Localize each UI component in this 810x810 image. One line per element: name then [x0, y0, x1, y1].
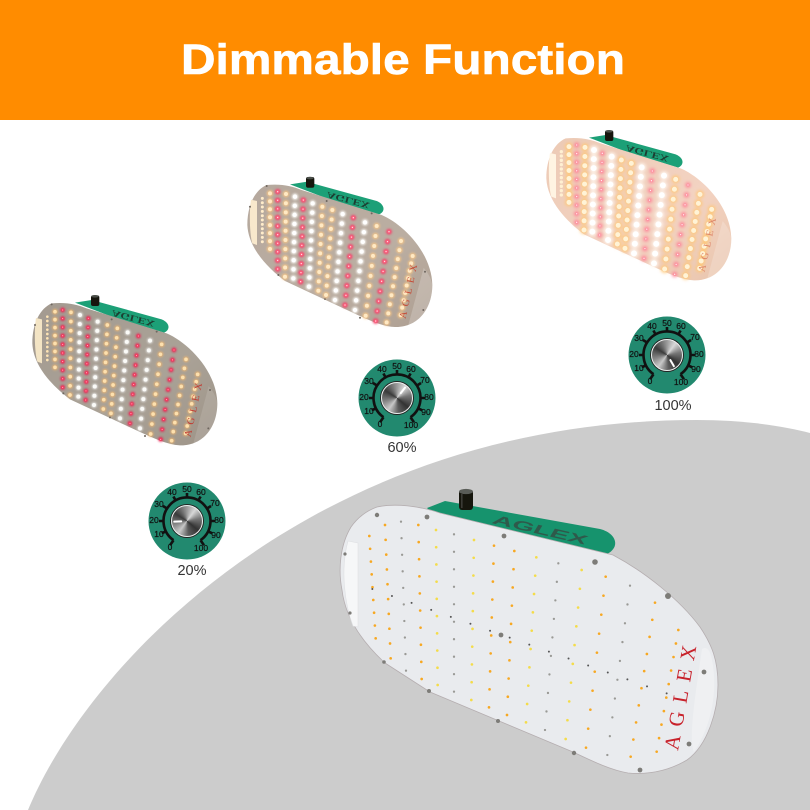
- dial: 60%: 40: [377, 364, 387, 374]
- panel: unlit LED board: [340, 489, 718, 773]
- dial: 100%: 30: [634, 333, 644, 343]
- dial: 60%: 70: [420, 375, 430, 385]
- knob set to 20: [171, 505, 203, 537]
- dial: 20%: 70: [210, 498, 220, 508]
- panel: light at 100% brightness: [546, 130, 731, 280]
- red logo: AGLEX: [697, 216, 719, 273]
- panel: light at 20% brightness: [32, 295, 217, 445]
- dial: 60%: 20: [359, 392, 369, 402]
- dial: 100%: 80: [694, 349, 704, 359]
- dial: 20%: [148, 482, 226, 560]
- gray curved backdrop: [28, 420, 810, 810]
- dial: 20%: 30: [154, 499, 164, 509]
- red logo: AGLEX: [659, 643, 701, 752]
- dial: 20%: 40: [167, 487, 177, 497]
- dial: 100%: 100: [674, 377, 688, 387]
- LED array: [561, 145, 712, 276]
- label: 60%: 60%: [387, 440, 417, 456]
- dial: 60%: 100: [404, 420, 418, 430]
- title: Dimmable Function: [181, 36, 625, 84]
- board body: [340, 505, 718, 773]
- label: 100%: 100%: [654, 398, 692, 414]
- dark LED row: [372, 589, 667, 693]
- red logo: AGLEX: [183, 381, 205, 438]
- dial: 60%: [358, 360, 436, 436]
- dial: 60%: 50: [392, 361, 402, 371]
- dial: 60%: 0: [378, 419, 383, 429]
- dial: 20%: 90: [211, 530, 221, 540]
- label: 20%: 20%: [177, 563, 207, 579]
- plate logo: AGLEX: [326, 190, 372, 211]
- dial: 100%: 0: [648, 376, 653, 386]
- dial: 60%: 30: [364, 376, 374, 386]
- LED grid: [369, 522, 678, 757]
- LED array: [47, 310, 198, 441]
- knob: [91, 295, 99, 306]
- knob: [605, 130, 613, 141]
- plate logo: AGLEX: [489, 512, 591, 547]
- dial: 60%: 90: [421, 407, 431, 417]
- gray LEDs: [401, 522, 630, 755]
- yellow LEDs: [436, 530, 582, 739]
- dial: 20%: 80: [214, 515, 224, 525]
- dial: 100%: 70: [690, 332, 700, 342]
- red logo: AGLEX: [398, 263, 420, 320]
- plate logo: AGLEX: [625, 143, 671, 164]
- orange LEDs: [369, 525, 678, 757]
- dial: 20%: 100: [194, 543, 208, 553]
- screws: [343, 513, 706, 772]
- dial: 20%: 50: [182, 484, 192, 494]
- left tab: [344, 541, 358, 627]
- dial: 20%: 10: [154, 529, 164, 539]
- dial: 60%: 10: [364, 406, 374, 416]
- knob set to 100: [651, 339, 683, 371]
- knob: [306, 177, 314, 188]
- plate logo: AGLEX: [111, 308, 157, 329]
- panel: light at 60% brightness: [247, 177, 432, 327]
- dial: 100%: 60: [676, 321, 686, 331]
- dial: 60%: 60: [406, 364, 416, 374]
- right tab: [692, 648, 714, 752]
- orange header band: [0, 0, 810, 120]
- dial: 100%: 90: [691, 364, 701, 374]
- dial: 60%: 80: [424, 392, 434, 402]
- control knob: [459, 489, 473, 510]
- dial: 100%: 20: [629, 349, 639, 359]
- dial: 100%: 40: [647, 321, 657, 331]
- dial: 20%: 0: [168, 542, 173, 552]
- dial: 20%: 20: [149, 515, 159, 525]
- LED array: [262, 192, 413, 322]
- dial: 100%: [628, 316, 706, 394]
- knob set to 60: [381, 382, 413, 414]
- dial: 20%: 60: [196, 487, 206, 497]
- green mounting plate: [427, 501, 615, 554]
- dial: 100%: 50: [662, 318, 672, 328]
- dial: 100%: 10: [634, 363, 644, 373]
